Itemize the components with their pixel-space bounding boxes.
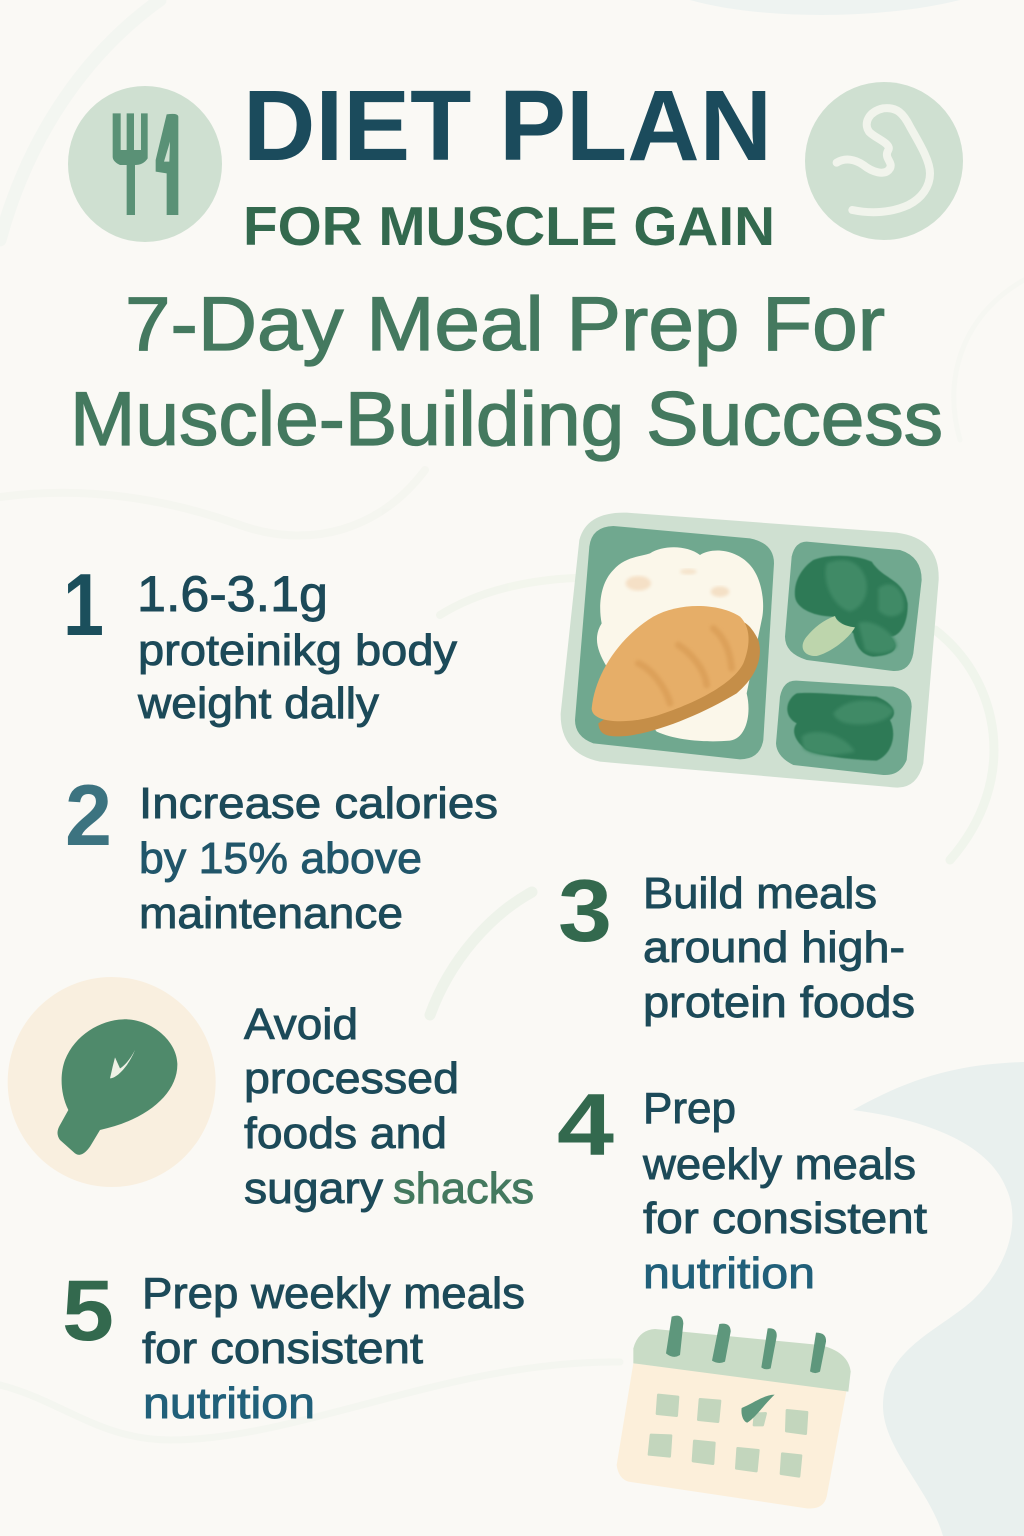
- number 2: 2: [65, 768, 112, 864]
- text: weekly prep: nutrition: [143, 1379, 315, 1428]
- text: weekly prep: [142, 1269, 525, 1428]
- text: high-protein foods: Build meals: [643, 869, 877, 918]
- text: calories: [139, 779, 498, 938]
- icon: processed snack warning: [8, 977, 216, 1187]
- icon: meal prep tray: [561, 513, 939, 788]
- icon: flexed arm: [805, 82, 963, 240]
- number 5: 5: [62, 1263, 114, 1359]
- text: calories: Increase calories: [139, 779, 498, 828]
- item: avoid processed foods: [244, 1000, 534, 1213]
- number 1: 1: [63, 555, 104, 654]
- text: calories: maintenance: [139, 889, 403, 938]
- rice: [597, 547, 763, 741]
- item 5: [62, 1263, 525, 1428]
- item 4: [557, 1075, 927, 1298]
- text: protein target: 1.6-3.1g: [137, 566, 328, 622]
- item 2: [65, 768, 498, 938]
- text: weekly prep: for consistent: [643, 1194, 927, 1243]
- text: high-protein foods: protein foods: [643, 978, 915, 1027]
- item: avoid processed foods: Avoid: [244, 1000, 358, 1049]
- number 3: 3: [558, 861, 612, 960]
- text: weekly prep: [642, 1084, 927, 1298]
- text: weekly prep: nutrition: [643, 1249, 815, 1298]
- item 1: [63, 555, 457, 728]
- icon: calendar: [617, 1316, 851, 1509]
- text: protein target: [137, 566, 457, 728]
- icon: fork and knife: [68, 86, 222, 242]
- item: avoid processed foods: foods and: [244, 1109, 447, 1158]
- item: avoid processed foods: shacks: [393, 1164, 534, 1213]
- heading: 7-day meal prep: 7-Day Meal Prep For: [125, 282, 885, 367]
- text: high-protein foods: around high-: [643, 923, 905, 972]
- subtitle: for muscle gain: FOR MUSCLE GAIN: [243, 195, 775, 257]
- heading: 7-day meal prep: Muscle-Building Success: [70, 377, 943, 462]
- broccoli: [795, 556, 908, 657]
- text: weekly prep: weekly meals: [642, 1140, 916, 1189]
- item: avoid processed foods: processed: [244, 1054, 459, 1103]
- heading: 7-day meal prep: [70, 282, 943, 462]
- number 4: 4: [557, 1075, 614, 1174]
- text: weekly prep: Prep weekly meals: [142, 1269, 525, 1318]
- greens: [787, 693, 894, 761]
- text: protein target: proteinikg body: [138, 626, 457, 675]
- text: weekly prep: for consistent: [142, 1324, 423, 1373]
- text: calories: by 15% above: [139, 834, 422, 883]
- chicken: [598, 620, 760, 736]
- text: weekly prep: Prep: [643, 1084, 736, 1133]
- item 3: [558, 861, 915, 1027]
- item: avoid processed foods: sugary: [244, 1164, 383, 1213]
- text: high-protein foods: [643, 869, 915, 1027]
- title: diet plan: DIET PLAN: [243, 70, 772, 182]
- text: protein target: weight dally: [137, 679, 379, 728]
